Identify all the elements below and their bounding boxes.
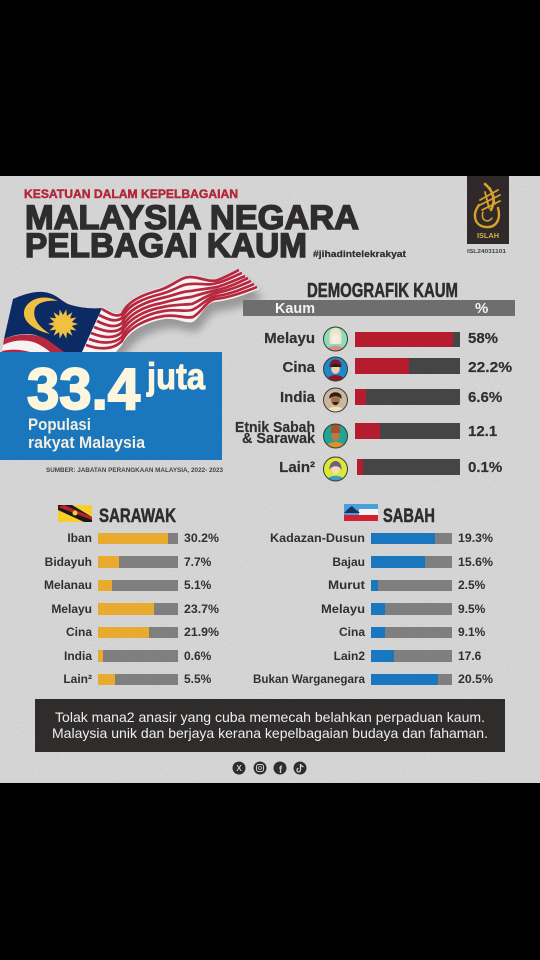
row: Cina: 22.2% — [468, 359, 512, 376]
chart: Sabah: 9.1% — [458, 625, 486, 639]
row: India — [280, 388, 502, 412]
population caption — [28, 415, 146, 452]
chart: Sabah: 20.5% — [458, 672, 493, 686]
panel: population — [0, 352, 222, 460]
eyebrow heading: KESATUAN DALAM KEPELBAGAIAN — [24, 187, 238, 201]
chart: Sarawak: Bidayuh — [45, 555, 92, 569]
icon: Melayu person — [324, 327, 348, 351]
flag crescent — [24, 297, 58, 334]
chart: Sarawak: 0.6% — [184, 649, 212, 663]
main title: PELBAGAI KAUM — [25, 227, 307, 265]
chart: Sarawak: Iban — [67, 531, 92, 545]
row: Melayu: 58% — [468, 330, 498, 347]
row: Cina: Cina — [282, 359, 316, 376]
chart: Sarawak: 5.1% — [184, 578, 212, 592]
hashtag: #jihadintelekrakyat — [313, 249, 407, 260]
row: Melayu — [264, 327, 498, 351]
population number: 33.4 — [27, 357, 140, 422]
row: Lain: Lain² — [279, 459, 315, 476]
icon: X: X — [236, 764, 242, 773]
source note: SUMBER: JABATAN PERANGKAAN MALAYSIA, 2022- 2023 — [46, 467, 223, 474]
table header: Kaum — [275, 300, 315, 317]
chart: demografik kaum — [235, 327, 512, 481]
social icons — [232, 762, 306, 776]
row: Etnik Sabah & Sarawak: Etnik Sabah — [235, 419, 315, 436]
chart: Sabah: 15.6% — [458, 555, 493, 569]
callout: Tolak mana2 anasir yang cuba memecah belahkan perpaduan kaum. — [55, 709, 485, 725]
chart: Sarawak: 21.9% — [184, 625, 219, 639]
Malaysian flag — [2, 269, 263, 361]
row: Cina — [282, 357, 512, 381]
chart: Sabah: Melayu — [321, 602, 365, 616]
icon: Etnik person — [324, 424, 348, 448]
row: Etnik Sabah & Sarawak: & Sarawak — [242, 430, 316, 447]
table header: % — [475, 300, 488, 317]
row: Melayu: Melayu — [264, 330, 315, 347]
unit: juta — [146, 356, 205, 397]
poster background — [0, 176, 540, 783]
heading: Sabah: SABAH — [383, 506, 435, 527]
chart: Sarawak: India — [64, 649, 92, 663]
row: Etnik Sabah & Sarawak: 12.1 — [468, 423, 497, 440]
chart: Sabah: Kadazan-Dusun — [270, 531, 365, 545]
icon: Cina person — [324, 357, 348, 381]
row: India: 6.6% — [468, 389, 502, 406]
row: Lain — [279, 457, 502, 481]
infographic poster — [0, 176, 540, 783]
chart: Sarawak: 30.2% — [184, 531, 219, 545]
icon: TikTok — [294, 762, 306, 774]
logo code: ISL24031101 — [467, 249, 506, 255]
main title — [25, 199, 359, 265]
chart: Sabah: Cina — [339, 625, 365, 639]
chart: Sabah — [253, 531, 493, 686]
heading: demografik kaum: DEMOGRAFIK KAUM — [307, 280, 458, 302]
chart: Sabah: Lain2 — [334, 649, 365, 663]
chart: Sabah: 2.5% — [458, 578, 486, 592]
table header — [243, 300, 515, 317]
chart: Sarawak: Melanau — [44, 578, 92, 592]
row: Etnik Sabah & Sarawak — [235, 419, 497, 448]
flag star — [48, 309, 78, 339]
chart: Sabah: 9.5% — [458, 602, 486, 616]
chart: Sarawak: 7.7% — [184, 555, 212, 569]
callout: Malaysia unik dan berjaya kerana kepelbagaian budaya dan fahaman. — [52, 725, 488, 741]
chart: Sarawak: Cina — [66, 625, 92, 639]
icon: Lain person — [324, 457, 348, 481]
chart: Sabah: Bukan Warganegara — [253, 672, 365, 686]
chart: Sarawak: Melayu — [51, 602, 92, 616]
logo: Islah — [467, 176, 509, 244]
chart: Sabah: 17.6 — [458, 649, 482, 663]
icon: India person — [324, 388, 348, 412]
icon: Sarawak flag — [58, 505, 92, 522]
icon: Facebook: f — [279, 765, 283, 776]
population caption: Populasi — [28, 415, 91, 434]
heading: Sarawak: SARAWAK — [99, 506, 176, 527]
main title: MALAYSIA NEGARA — [25, 199, 359, 237]
chart: Sarawak: 23.7% — [184, 602, 219, 616]
chart: Sarawak: Lain² — [63, 672, 92, 686]
callout — [35, 699, 505, 752]
logo: Islah: ISLAH — [477, 231, 499, 240]
row: India: India — [280, 389, 316, 406]
row: Lain: 0.1% — [468, 459, 502, 476]
chart: Sabah: 19.3% — [458, 531, 493, 545]
population caption: rakyat Malaysia — [28, 433, 146, 452]
icon: Sabah flag — [344, 504, 378, 521]
chart: Sarawak — [44, 531, 219, 686]
chart: Sarawak: 5.5% — [184, 672, 212, 686]
chart: Sabah: Murut — [328, 578, 365, 592]
chart: Sabah: Bajau — [332, 555, 365, 569]
icon: Instagram — [254, 762, 266, 774]
